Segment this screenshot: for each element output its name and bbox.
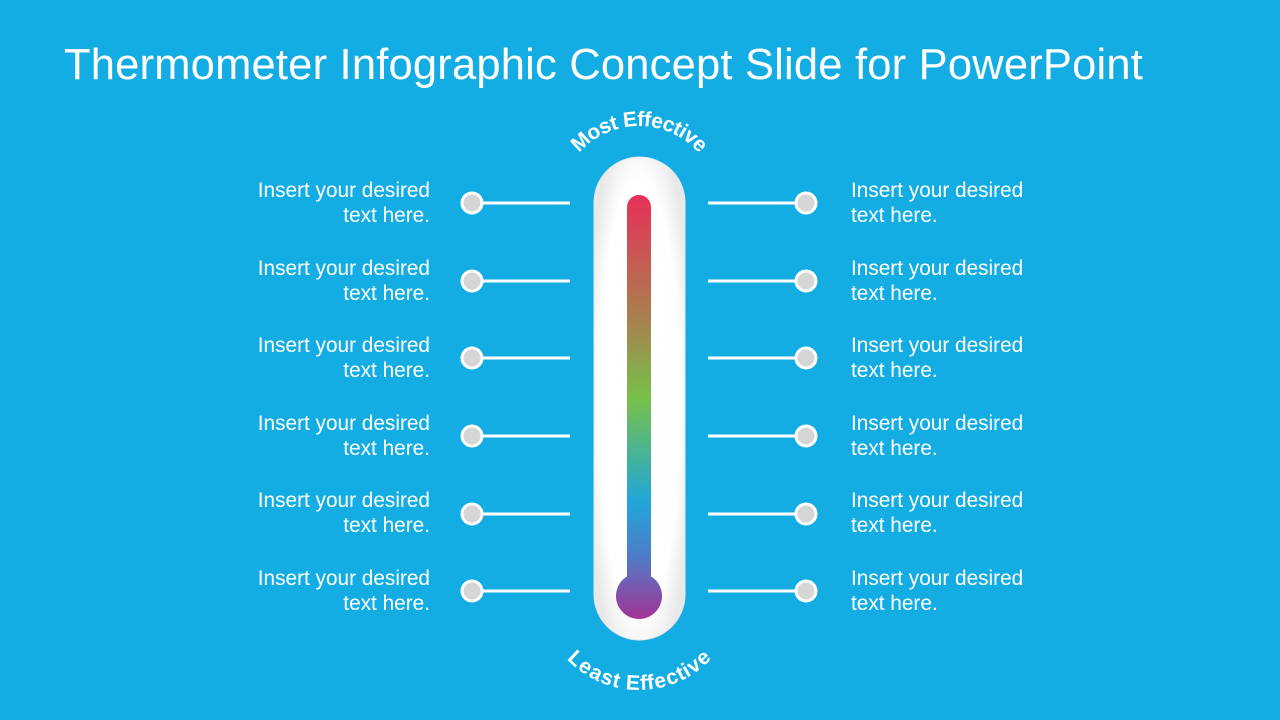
text: Insert your desired <box>851 412 1023 435</box>
text: text here. <box>851 514 938 537</box>
text: Insert your desired <box>258 567 430 590</box>
label: least effective: Least Effective <box>568 650 710 690</box>
text: text here. <box>343 592 430 615</box>
text: text here. <box>343 359 430 382</box>
text: text here. <box>343 282 430 305</box>
label: most effective: Most Effective <box>570 110 705 152</box>
text: Insert your desired <box>258 334 430 357</box>
text: text here. <box>851 204 938 227</box>
text: Insert your desired <box>851 489 1023 512</box>
title: Thermometer Infographic Concept Slide for PowerPoint <box>64 41 1143 89</box>
text: Insert your desired <box>851 257 1023 280</box>
right labels <box>851 179 1023 615</box>
text: text here. <box>851 282 938 305</box>
text: Insert your desired <box>258 257 430 280</box>
text: text here. <box>851 437 938 460</box>
left labels <box>258 179 430 615</box>
text: text here. <box>851 359 938 382</box>
thermometer body <box>594 157 685 640</box>
text: text here. <box>343 437 430 460</box>
text: Insert your desired <box>258 412 430 435</box>
connectors <box>462 193 816 601</box>
text: text here. <box>343 204 430 227</box>
text: Insert your desired <box>851 334 1023 357</box>
text: Insert your desired <box>258 179 430 202</box>
text: Insert your desired <box>851 179 1023 202</box>
text: Insert your desired <box>851 567 1023 590</box>
text: text here. <box>851 592 938 615</box>
text: Insert your desired <box>258 489 430 512</box>
text: text here. <box>343 514 430 537</box>
